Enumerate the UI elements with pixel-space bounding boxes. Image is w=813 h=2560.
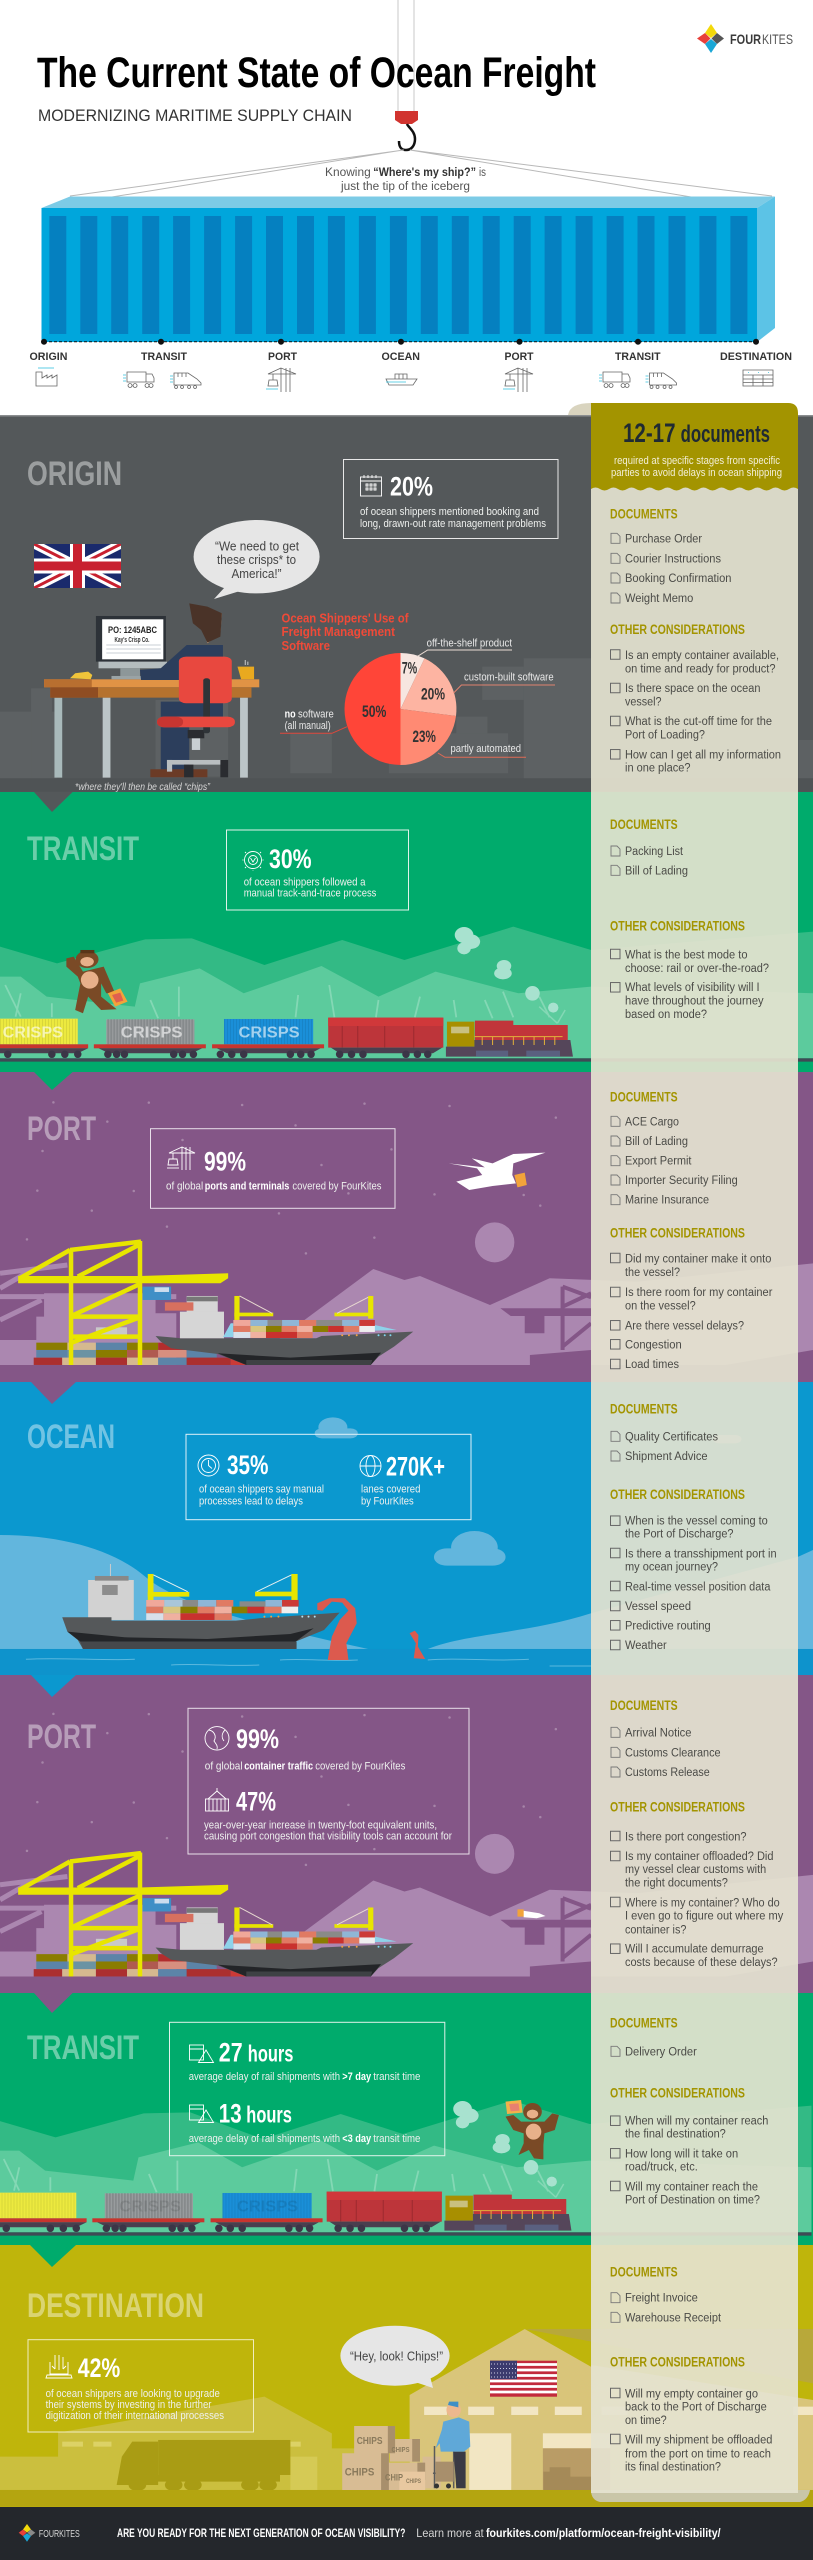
port documents: Export Permit — [625, 1156, 692, 1168]
stat box: rail delays: 27 — [219, 2038, 243, 2068]
transit considerations: OTHER CONSIDERATIONS — [610, 919, 745, 934]
footer learn more: Learn more at — [416, 2526, 484, 2540]
transit documents: DOCUMENTS — [610, 817, 678, 832]
transit 2 considerations: Port of Destination on time? — [625, 2195, 760, 2207]
ocean considerations: Is there a transshipment port in — [625, 1548, 777, 1560]
chart title — [282, 610, 409, 653]
transit considerations — [610, 919, 769, 1021]
connector: transit to port — [34, 1072, 73, 1090]
origin considerations: in one place? — [625, 762, 690, 774]
subtitle: MODERNIZING MARITIME SUPPLY CHAIN — [38, 107, 352, 125]
stat box: 20%: 20% — [390, 472, 433, 502]
caption: tip of the iceberg — [325, 167, 486, 193]
faint crisps labels: CRISPS — [237, 2198, 298, 2215]
illustration: seagull resting — [517, 1909, 545, 1918]
stat box: 35% and 270K+: 270K+ — [386, 1451, 445, 1481]
stat box: 99% and 47%: 47% — [236, 1787, 276, 1817]
stat box: rail delays: transit time — [373, 2133, 420, 2145]
icon: clock gear — [198, 1455, 219, 1476]
stat box: 99% and 47%: covered by FourKites — [315, 1761, 406, 1773]
icon: train — [170, 373, 201, 388]
origin documents: DOCUMENTS — [610, 507, 678, 522]
logo: FourKites: FOUR — [730, 31, 761, 47]
icon: crane — [167, 1147, 195, 1170]
illustration: office worker at desk: PO: 1245ABC — [108, 625, 157, 636]
shipping container — [42, 196, 775, 342]
destination considerations: back to the Port of Discharge — [625, 2401, 767, 2413]
speech bubble: chips — [340, 2326, 450, 2388]
chart: freight management software — [280, 610, 555, 765]
flag: United Kingdom — [34, 544, 121, 588]
icon: truck — [599, 372, 630, 387]
port 2 considerations: Where is my container? Who do — [625, 1897, 780, 1909]
origin considerations: Is there space on the ocean — [625, 683, 760, 695]
ocean considerations — [610, 1487, 777, 1652]
scroll header: 12-17 — [623, 418, 676, 448]
transit 2 considerations: When will my container reach — [625, 2116, 768, 2128]
band: transit 2 — [0, 1993, 813, 2245]
journey timeline: DESTINATION — [720, 351, 792, 363]
pie chart: 20% — [421, 684, 445, 704]
stat box: rail delays: 13 — [219, 2099, 242, 2129]
band: port — [0, 1072, 813, 1382]
port 2 documents — [610, 1698, 721, 1779]
port considerations: Load times — [625, 1359, 679, 1371]
pie labels: off-the-shelf product — [427, 637, 512, 649]
illustration: gorilla with chips — [506, 2100, 559, 2159]
chart title: Freight Management — [282, 624, 396, 639]
icon: globe — [360, 1456, 381, 1476]
stat box: 20% — [344, 460, 558, 538]
transit considerations: have throughout the journey — [625, 996, 764, 1008]
origin documents — [610, 507, 732, 605]
flag: United States — [490, 2361, 557, 2397]
origin considerations — [610, 622, 781, 774]
port 2 documents: Customs Release — [625, 1767, 710, 1779]
stat box: 99% and 47%: container traffic — [244, 1761, 313, 1773]
ocean considerations: the Port of Discharge? — [625, 1528, 734, 1540]
footer — [0, 2507, 813, 2560]
stat box: 20%: long, drawn-out rate management problems — [360, 518, 546, 530]
stat box: 99% and 47%: 99% — [236, 1724, 279, 1754]
port 2 considerations: container is? — [625, 1924, 686, 1936]
stat box: rail delays: hours — [248, 2041, 293, 2067]
ocean considerations: Real-time vessel position data — [625, 1581, 771, 1593]
icon: hoisted container — [206, 1788, 228, 1811]
transit 2 documents: Delivery Order — [625, 2046, 697, 2058]
band: ocean — [0, 1382, 813, 1675]
heading: PORT: PORT — [27, 1110, 96, 1148]
speech bubble: crisps — [194, 520, 320, 599]
illustration: gorilla with chips — [66, 950, 128, 1013]
chips box labels: CHIPS — [392, 2447, 410, 2454]
scroll header: parties to avoid delays in ocean shipping — [611, 467, 782, 479]
icon: warehouse — [743, 370, 773, 386]
destination considerations: from the port on time to reach — [625, 2448, 771, 2460]
stat box: 99% ports: ports and terminals — [205, 1180, 289, 1192]
stat box: 35% and 270K+: 35% — [227, 1450, 268, 1480]
scroll header — [591, 403, 798, 490]
heading: OCEAN: OCEAN — [27, 1418, 115, 1456]
icon: globe — [205, 1727, 229, 1750]
pie chart: 50% — [362, 702, 386, 721]
origin documents: Weight Memo — [625, 593, 693, 605]
port considerations: Is there room for my container — [625, 1287, 773, 1299]
panel: documents scroll — [568, 403, 810, 2502]
destination considerations: its final destination? — [625, 2462, 721, 2474]
illustration: office worker at desk — [44, 603, 259, 778]
connector: origin to transit — [34, 792, 73, 812]
origin documents: Courier Instructions — [625, 553, 721, 565]
connector: ocean to port — [31, 1675, 76, 1697]
transit considerations: based on mode? — [625, 1009, 707, 1021]
stat box: 99% ports — [150, 1129, 395, 1208]
title: The Current State of Ocean Freight — [37, 49, 596, 97]
stat box: 30%: 30% — [269, 844, 312, 874]
origin considerations: What is the cut-off time for the — [625, 716, 772, 728]
stat box: 35% and 270K+: lanes covered — [361, 1484, 420, 1496]
stat box: 99% ports: 99% — [204, 1147, 246, 1177]
destination considerations: OTHER CONSIDERATIONS — [610, 2355, 745, 2370]
pie labels: no — [285, 708, 296, 720]
transit documents: Bill of Lading — [625, 865, 688, 877]
icon: truck — [123, 372, 154, 387]
footnote: *where they'll then be called “chips” — [75, 782, 211, 793]
caption: tip of the iceberg: Knowing — [325, 167, 371, 179]
port documents: ACE Cargo — [625, 1116, 679, 1128]
faint crisps labels: CRISPS — [119, 2198, 181, 2215]
transit 2 considerations: Will my container reach the — [625, 2181, 758, 2193]
stat box: 20%: of ocean shippers mentioned booking and — [360, 506, 539, 518]
stat box: 99% and 47%: of global — [205, 1761, 243, 1773]
transit considerations: choose: rail or over-the-road? — [625, 963, 769, 975]
transit 2 considerations: OTHER CONSIDERATIONS — [610, 2086, 745, 2101]
transit 2 considerations: How long will it take on — [625, 2148, 738, 2160]
icon: ship — [386, 374, 417, 385]
port 2 documents: Arrival Notice — [625, 1727, 692, 1739]
port 2 considerations: my vessel clear customs with — [625, 1864, 766, 1876]
journey timeline: PORT — [268, 351, 297, 363]
stat box: rail delays: >7 day — [342, 2071, 372, 2083]
origin considerations: OTHER CONSIDERATIONS — [610, 622, 745, 637]
speech bubble: crisps: “We need to get — [215, 538, 299, 554]
transit considerations: What levels of visibility will I — [625, 982, 760, 994]
port 2 documents: DOCUMENTS — [610, 1698, 678, 1713]
band: port 2 — [0, 1675, 813, 1993]
illustration: cargo ship and kraken — [62, 1564, 425, 1660]
heading: DESTINATION: DESTINATION — [27, 2287, 204, 2325]
pie chart: 23% — [412, 727, 436, 746]
pie labels: custom-built software — [464, 672, 554, 684]
port 2 considerations — [610, 1800, 784, 1969]
stat box: 99% ports: of global — [166, 1180, 203, 1192]
journey timeline: TRANSIT — [615, 351, 661, 363]
stat box: 99% and 47%: causing port congestion that visibility tools can account for — [204, 1831, 452, 1843]
chips box labels: CHIP — [385, 2472, 403, 2482]
pie chart: 7% — [402, 659, 417, 678]
caption: tip of the iceberg: just the tip of the iceberg — [340, 181, 470, 193]
transit 2 considerations: the final destination? — [625, 2128, 726, 2140]
chart title: Software — [282, 638, 330, 653]
ocean documents: Quality Certificates — [625, 1431, 718, 1443]
caption: tip of the iceberg: “Where's my ship?” — [373, 167, 476, 179]
port considerations: Did my container make it onto — [625, 1253, 771, 1265]
icon: train — [646, 373, 676, 388]
port documents: Bill of Lading — [625, 1136, 688, 1148]
illustration: ocean scene — [0, 1417, 813, 1675]
port 2 considerations: Will I accumulate demurrage — [625, 1944, 764, 1956]
stat box: 42%: digitization of their international processes — [46, 2410, 224, 2422]
stat box: 42%: of ocean shippers are looking to upgrade — [46, 2388, 220, 2400]
band: destination — [0, 2245, 813, 2507]
stat box: 99% and 47% — [188, 1708, 469, 1854]
port considerations: Congestion — [625, 1339, 682, 1351]
icon: gear — [242, 850, 264, 870]
band: transit — [0, 792, 813, 1072]
port considerations: OTHER CONSIDERATIONS — [610, 1225, 745, 1240]
stat box: rail delays: average delay of rail shipments with — [189, 2133, 340, 2145]
destination considerations: on time? — [625, 2415, 667, 2427]
icon: digitized laptop — [46, 2355, 72, 2378]
port 2 considerations: costs because of these delays? — [625, 1957, 778, 1969]
ocean documents: DOCUMENTS — [610, 1401, 678, 1416]
ocean documents — [610, 1401, 718, 1463]
journey timeline: TRANSIT — [141, 351, 187, 363]
transit documents: Packing List — [625, 846, 684, 858]
port considerations — [610, 1225, 773, 1371]
speech bubble: crisps: these crisps* to — [217, 552, 296, 567]
caption: tip of the iceberg: is — [479, 167, 486, 179]
port documents: DOCUMENTS — [610, 1089, 678, 1104]
band: origin — [0, 415, 813, 793]
stat box: 30%: of ocean shippers followed a — [244, 876, 366, 888]
pie labels: (all manual) — [285, 720, 331, 732]
stat box: 99% ports: covered by FourKites — [292, 1180, 382, 1192]
illustration: office worker at desk: Kay's Crisp Co. — [114, 637, 150, 644]
logo: FourKites — [697, 24, 793, 53]
origin considerations: Is an empty container available, — [625, 650, 779, 662]
icon: calendar — [360, 475, 382, 496]
footer logo: FOURKITES — [39, 2528, 80, 2540]
stat box: rail delays: average delay of rail shipments with — [189, 2071, 340, 2083]
ocean considerations: my ocean journey? — [625, 1562, 718, 1574]
chips box labels: CHIPS — [357, 2436, 383, 2447]
stat box: 42%: their systems by investing in the further — [46, 2399, 212, 2411]
footer url: fourkites.com/platform/ocean-freight-visibility/ — [486, 2526, 721, 2540]
heading: PORT: PORT — [27, 1718, 96, 1756]
illustration: mountains and train — [0, 2101, 812, 2236]
port 2 considerations: Is there port congestion? — [625, 1831, 746, 1843]
port considerations: the vessel? — [625, 1267, 680, 1279]
destination documents: DOCUMENTS — [610, 2265, 678, 2280]
stat box: rail delays: hours — [246, 2102, 292, 2128]
connector: port to ocean — [31, 1382, 76, 1404]
crisps container labels: CRISPS — [121, 1024, 182, 1041]
crisps container labels: CRISPS — [3, 1024, 63, 1041]
transit 2 documents: DOCUMENTS — [610, 2016, 678, 2031]
icon: calendar warning — [190, 2105, 214, 2122]
port 2 considerations: OTHER CONSIDERATIONS — [610, 1800, 745, 1815]
origin considerations: How can I get all my information — [625, 749, 781, 761]
chips box labels: CHIPS — [406, 2479, 421, 2485]
heading: TRANSIT: TRANSIT — [27, 2029, 139, 2067]
pie labels: partly automated — [450, 743, 521, 755]
port documents: Marine Insurance — [625, 1195, 709, 1207]
port considerations: Are there vessel delays? — [625, 1320, 744, 1332]
header section — [0, 0, 813, 415]
connector: port to transit — [34, 1993, 73, 2013]
speech bubble: crisps: America!” — [232, 566, 282, 581]
origin documents: Booking Confirmation — [625, 573, 732, 585]
footer call to action: ARE YOU READY FOR THE NEXT GENERATION OF OCEAN VISIBILITY? — [117, 2528, 405, 2540]
illustration: warehouses and truck — [0, 2329, 813, 2507]
crisps container labels: CRISPS — [238, 1024, 300, 1041]
chart title: Ocean Shippers' Use of — [282, 610, 409, 626]
stat box: 35% and 270K+ — [186, 1434, 471, 1520]
ocean considerations: Predictive routing — [625, 1620, 711, 1632]
port 2 documents: Customs Clearance — [625, 1747, 721, 1759]
stat box: 35% and 270K+: of ocean shippers say manual — [199, 1484, 324, 1496]
stat box: 30%: manual track-and-trace process — [244, 888, 377, 900]
ocean considerations: When is the vessel coming to — [625, 1516, 768, 1528]
port documents: Importer Security Filing — [625, 1175, 738, 1187]
scroll header: required at specific stages from specific — [614, 455, 780, 467]
chips box labels: CHIPS — [345, 2466, 374, 2478]
illustration: mountains and train — [0, 927, 813, 1062]
origin documents: Purchase Order — [625, 533, 702, 545]
icon: crane hook — [395, 111, 418, 150]
illustration: port scene — [0, 1102, 813, 1365]
destination documents: Warehouse Receipt — [625, 2312, 722, 2324]
stat box: 99% and 47%: year-over-year increase in twenty-foot equivalent units, — [204, 1820, 437, 1832]
ocean documents: Shipment Advice — [625, 1451, 708, 1463]
destination considerations — [610, 2355, 772, 2474]
transit considerations: What is the best mode to — [625, 949, 748, 961]
journey timeline: PORT — [504, 351, 534, 363]
stat box: rail delays — [170, 2022, 445, 2156]
pie labels: software — [298, 708, 334, 720]
pie labels — [285, 637, 554, 755]
connector: transit to destination — [30, 2245, 76, 2267]
stat box: rail delays: transit time — [373, 2071, 420, 2083]
destination considerations: Will my empty container go — [625, 2389, 758, 2401]
stat box: 42%: 42% — [78, 2353, 120, 2383]
destination documents: Freight Invoice — [625, 2293, 698, 2305]
origin considerations: Port of Loading? — [625, 729, 705, 741]
footer logo — [19, 2524, 80, 2542]
port documents — [610, 1089, 738, 1207]
stat box: 35% and 270K+: processes lead to delays — [199, 1496, 303, 1508]
transit 2 considerations: road/truck, etc. — [625, 2162, 698, 2174]
faint crisps labels — [119, 2198, 298, 2215]
ocean considerations: Weather — [625, 1640, 667, 1652]
icon: crane — [503, 368, 533, 392]
sling ropes — [44, 150, 772, 208]
stat box: 35% and 270K+: by FourKites — [361, 1496, 414, 1508]
speech bubble: chips: “Hey, look! Chips!” — [350, 2350, 443, 2364]
heading: TRANSIT: TRANSIT — [27, 830, 139, 868]
illustration: seagull with chips — [449, 1153, 545, 1190]
pie chart — [344, 653, 456, 765]
icon: factory — [36, 368, 57, 386]
transit 2 documents — [610, 2016, 697, 2058]
journey timeline: ORIGIN — [30, 351, 67, 363]
transit documents — [610, 817, 688, 877]
stat box: 30% — [226, 830, 408, 910]
port 2 considerations: I even go to figure out where my — [625, 1911, 784, 1923]
journey timeline — [30, 342, 792, 363]
transit 2 considerations — [610, 2086, 768, 2207]
stat box: rail delays: <3 day — [342, 2133, 372, 2145]
port 2 considerations: the right documents? — [625, 1877, 728, 1889]
destination documents — [610, 2265, 722, 2324]
origin considerations: on time and ready for product? — [625, 664, 776, 676]
crisps container labels — [3, 1024, 300, 1041]
port 2 considerations: Is my container offloaded? Did — [625, 1851, 774, 1863]
city silhouette background — [0, 658, 813, 792]
stat box: 42% — [28, 2340, 254, 2432]
scroll header: documents — [681, 421, 770, 448]
logo: FourKites: KITES — [762, 31, 793, 47]
icon: calendar warning — [190, 2045, 214, 2062]
origin considerations: vessel? — [625, 696, 662, 708]
journey timeline: OCEAN — [382, 351, 420, 363]
chips box labels — [345, 2436, 421, 2485]
ocean considerations: OTHER CONSIDERATIONS — [610, 1487, 745, 1502]
destination considerations: Will my shipment be offloaded — [625, 2435, 772, 2447]
port considerations: on the vessel? — [625, 1300, 696, 1312]
ocean considerations: Vessel speed — [625, 1601, 691, 1613]
illustration: port scene — [0, 1714, 813, 1976]
icon: crane — [266, 368, 296, 392]
heading: ORIGIN: ORIGIN — [27, 455, 122, 493]
